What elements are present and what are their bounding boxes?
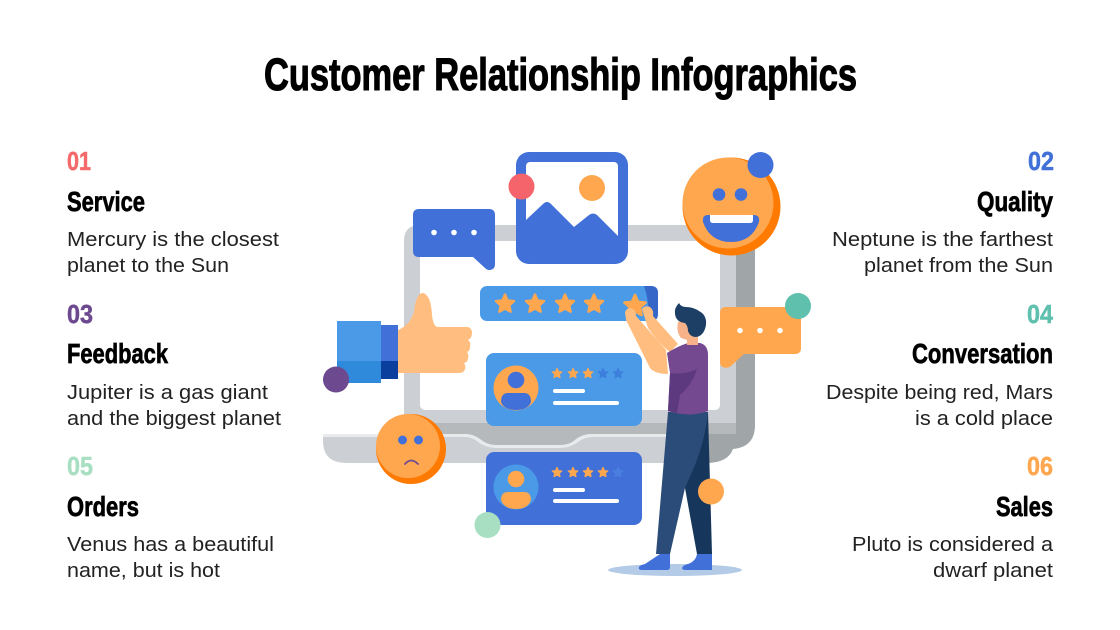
accent circle orange xyxy=(698,478,724,504)
laptop illustration xyxy=(323,225,755,463)
text block: 04 Conversation: Conversation xyxy=(912,338,1053,369)
text block: 03 Feedback: 03 xyxy=(67,299,93,329)
person figure xyxy=(608,303,742,576)
text block: 03 Feedback: Feedback xyxy=(67,338,168,369)
review card 1 xyxy=(486,353,642,426)
text block: 04 Conversation: is a cold place xyxy=(915,408,1053,430)
shoes xyxy=(639,554,712,570)
text block: 01 Service: Mercury is the closest xyxy=(67,229,279,251)
text block: 01 Service: 01 xyxy=(67,146,91,176)
text block: 05 Orders: Orders xyxy=(67,491,139,522)
icon: chat bubble orange xyxy=(720,293,811,368)
icon: happy face xyxy=(682,152,780,256)
text block: 01 Service xyxy=(67,146,279,277)
text block: 04 Conversation: Despite being red, Mars xyxy=(826,382,1053,404)
text block: 03 Feedback xyxy=(67,299,281,430)
text block: 01 Service: planet to the Sun xyxy=(67,255,229,277)
text block: 02 Quality: planet from the Sun xyxy=(864,255,1053,277)
text block: 04 Conversation: 04 xyxy=(1027,299,1053,329)
text block: 06 Sales: dwarf planet xyxy=(933,560,1053,582)
text block: 02 Quality: Neptune is the farthest xyxy=(832,229,1053,251)
text block: 03 Feedback: and the biggest planet xyxy=(67,408,281,430)
text block: 03 Feedback: Jupiter is a gas giant xyxy=(67,382,268,404)
review card 2 xyxy=(474,452,642,538)
text block: 02 Quality: 02 xyxy=(1028,146,1054,176)
text block: 02 Quality: Quality xyxy=(977,186,1053,217)
text block: 01 Service: Service xyxy=(67,186,145,217)
icon: image card xyxy=(508,152,628,264)
icon: sad face xyxy=(376,414,446,484)
text block: 05 Orders: 05 xyxy=(67,451,93,481)
shirt xyxy=(667,343,708,414)
title: Customer Relationship Infographics xyxy=(264,49,857,100)
text block: 06 Sales: 06 xyxy=(1027,451,1053,481)
hair xyxy=(675,303,706,337)
text block: 06 Sales xyxy=(852,451,1054,582)
rating bar xyxy=(480,286,658,321)
text block: 06 Sales: Pluto is considered a xyxy=(852,534,1054,556)
text block: 05 Orders: name, but is hot xyxy=(67,560,220,582)
arms xyxy=(625,306,678,374)
icon: chat bubble blue xyxy=(413,209,495,270)
icon: thumbs up hand xyxy=(323,293,472,392)
legs xyxy=(656,412,712,554)
text block: 04 Conversation xyxy=(826,299,1053,430)
text block: 05 Orders: Venus has a beautiful xyxy=(67,534,274,556)
text block: 06 Sales: Sales xyxy=(996,491,1053,522)
text block: 02 Quality xyxy=(832,146,1054,277)
ground shadow xyxy=(608,564,742,576)
text block: 05 Orders xyxy=(67,451,274,582)
neck and face xyxy=(677,318,698,345)
